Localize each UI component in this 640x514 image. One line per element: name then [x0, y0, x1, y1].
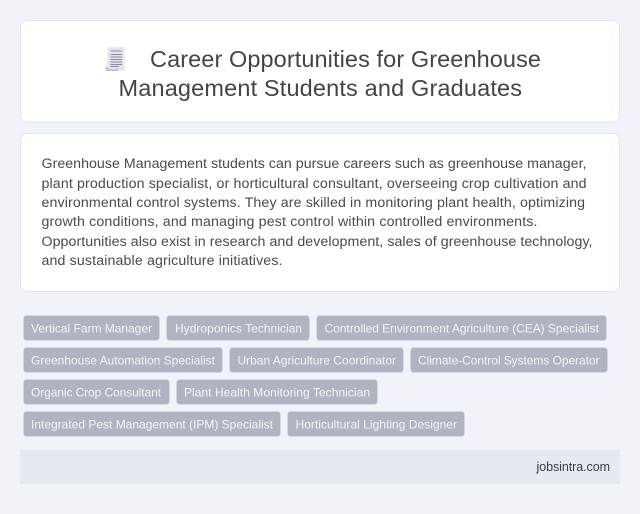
- tag: IPM Specialist: Integrated Pest Management (IPM) Specialist: [31, 418, 274, 432]
- tag: Plant Health Monitoring Technician: Plant Health Monitoring Technician: [184, 386, 370, 400]
- tag: Urban Agriculture Coordinator: [230, 348, 404, 372]
- text block: description: and sustainable agriculture initiatives.: [42, 253, 282, 269]
- tag: Plant Health Monitoring Technician: [176, 380, 378, 404]
- title: Career Opportunities for Greenhouse: [150, 46, 541, 72]
- tag: Climate-Control Systems Operator: Climate-Control Systems Operator: [418, 354, 600, 368]
- tag: Urban Agriculture Coordinator: Urban Agriculture Coordinator: [238, 354, 396, 368]
- tag: Horticultural Lighting Designer: [288, 412, 464, 436]
- tag: Vertical Farm Manager: [24, 316, 160, 340]
- tag: Greenhouse Automation Specialist: [24, 348, 222, 372]
- text block: description: Greenhouse Management students can pursue careers such as greenhouse manager,: [42, 156, 586, 172]
- tag: Hydroponics Technician: [166, 316, 310, 340]
- tag: Hydroponics Technician: Hydroponics Technician: [175, 322, 302, 336]
- text block: description: Opportunities also exist in research and development, sales of greenhouse technology,: [42, 234, 592, 250]
- tag: Climate-Control Systems Operator: [410, 348, 608, 372]
- tag: IPM Specialist: [24, 412, 280, 436]
- footer: [20, 450, 620, 484]
- tag: CEA Specialist: Controlled Environment Agriculture (CEA) Specialist: [324, 322, 600, 336]
- title: Management Students and Graduates: [118, 75, 522, 101]
- text block: description: growth conditions, and managing pest control within controlled environments.: [42, 214, 538, 230]
- text block: description: plant production specialist, or horticultural consultant, overseeing crop cultivation and: [42, 176, 586, 192]
- tag: CEA Specialist: [316, 316, 606, 340]
- panel: description: [20, 134, 620, 292]
- tag: Organic Crop Consultant: [24, 380, 170, 404]
- tag list: [24, 316, 608, 436]
- footer text: jobsintra.com: [536, 460, 610, 474]
- text block: description: [42, 156, 592, 269]
- icon: paper scroll: [105, 47, 125, 71]
- tag: Organic Crop Consultant: Organic Crop Consultant: [31, 386, 162, 400]
- tag: Greenhouse Automation Specialist: Greenhouse Automation Specialist: [31, 354, 216, 368]
- title: [118, 46, 541, 101]
- panel: title card: [20, 20, 620, 122]
- tag: Vertical Farm Manager: Vertical Farm Manager: [31, 322, 152, 336]
- tag: Horticultural Lighting Designer: Horticultural Lighting Designer: [296, 418, 457, 432]
- text block: description: environmental control systems. They are skilled in monitoring plant health, optimizing: [42, 195, 585, 211]
